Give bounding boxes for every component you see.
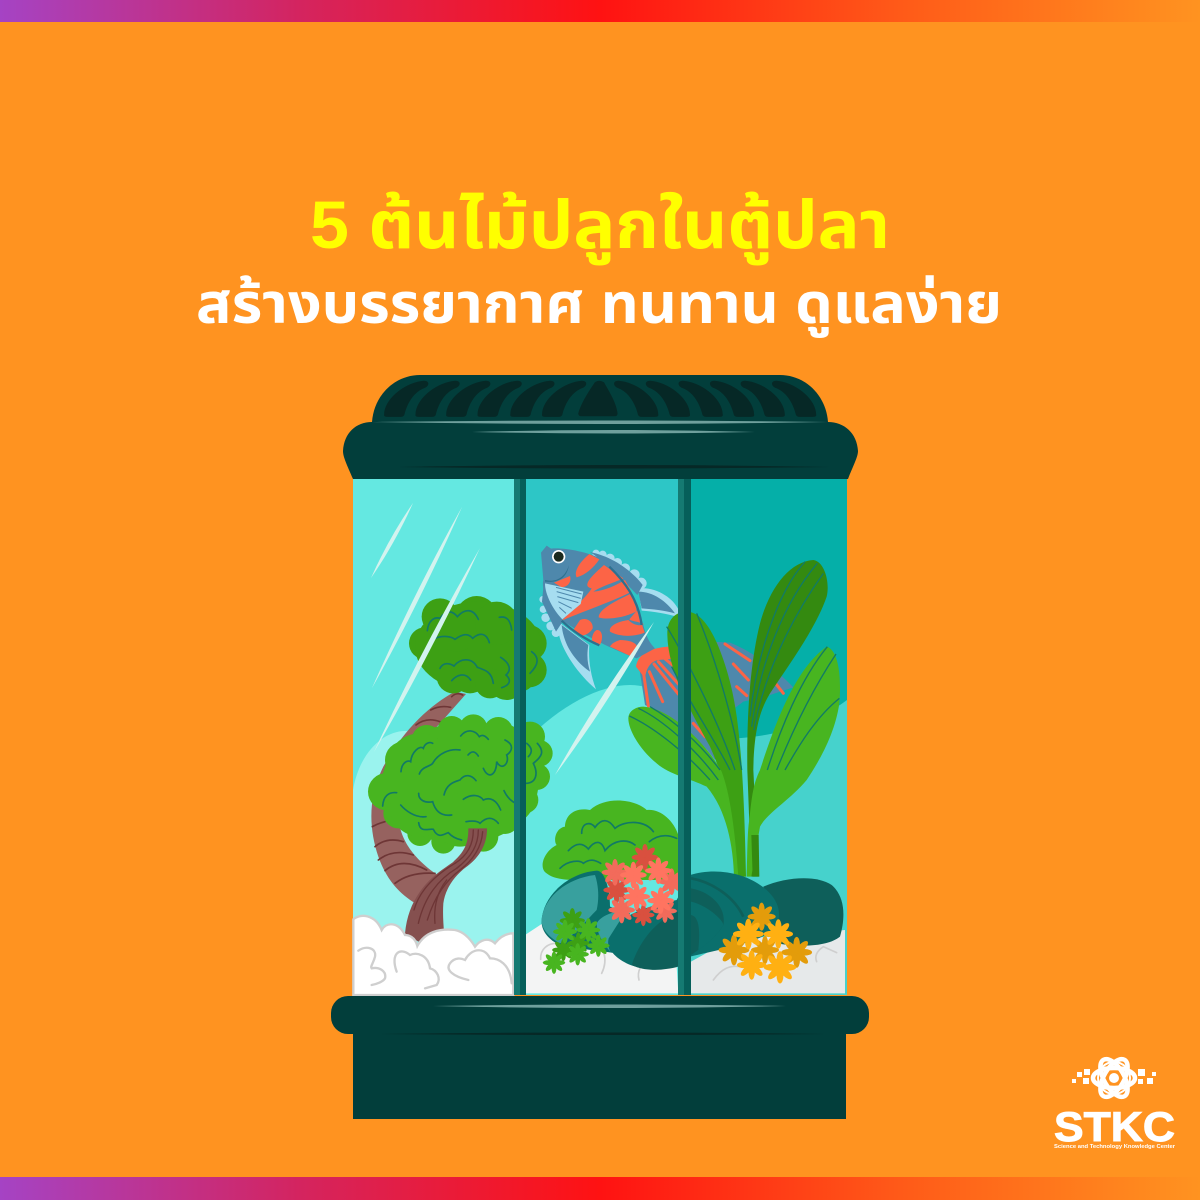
small bush lines [560, 821, 677, 868]
gravel curl lines [358, 948, 512, 988]
lower foliage [368, 714, 553, 854]
upper foliage [409, 596, 547, 700]
fish orange stripes [554, 554, 645, 657]
plant stem: dark [751, 835, 759, 877]
fish tail orange base [636, 646, 678, 678]
upper foliage lines [427, 611, 537, 688]
base highlight [433, 1004, 786, 1008]
lower foliage lines [383, 731, 542, 840]
left gravel [353, 916, 513, 995]
bottom gradient bar [0, 1177, 1200, 1200]
logo tagline: Science and Technology Knowledge Center [1054, 1144, 1176, 1150]
band shadow line [399, 465, 829, 468]
tank base rim [331, 996, 869, 1034]
pillar: left [514, 479, 526, 995]
grey gravel: right [691, 930, 845, 993]
back trunk [371, 692, 466, 905]
stone: right [763, 878, 843, 946]
stand shadow line [380, 1032, 825, 1035]
small bush [543, 801, 678, 880]
glass reflections [371, 503, 654, 775]
plant leaf: right veins [767, 647, 839, 770]
fish scallops [539, 550, 647, 637]
fish tail rays [643, 644, 783, 737]
stone: left rim [542, 871, 630, 953]
fish lower fin [558, 622, 596, 689]
lid vents [384, 381, 816, 417]
stone: ridge [691, 902, 723, 950]
fish belly band [542, 580, 563, 632]
tank top band [343, 422, 858, 479]
plant leaf: right [747, 647, 840, 877]
fish [539, 546, 793, 760]
logo pixels [1072, 1069, 1156, 1084]
plant leaf: top veins [750, 562, 823, 730]
gravel curl lines [541, 943, 837, 980]
fish lower fin inner [562, 625, 590, 672]
green flowers [543, 908, 610, 974]
logo atom icon [1093, 1055, 1135, 1101]
front trunk top stripes [455, 830, 483, 870]
front trunk top over foliage [453, 828, 487, 867]
band highlights [372, 420, 828, 434]
tank stand [353, 1033, 846, 1119]
fish pupil [554, 552, 564, 562]
subtitle: สร้างบรรยากาศ ทนทาน ดูแลง่าย [196, 272, 1002, 338]
plant leaf: low left veins [629, 707, 720, 780]
STKC logo [1054, 1055, 1176, 1150]
background hill: left [353, 731, 514, 995]
plant leaf: centre veins [667, 613, 742, 770]
tank lid [372, 375, 828, 422]
yellow flowers [719, 903, 812, 983]
aquarium illustration [331, 375, 869, 1119]
stone: middle shadow [632, 912, 678, 970]
background hill: centre [525, 685, 679, 995]
fish body [541, 546, 655, 658]
fish tail [638, 642, 793, 760]
coral flowers [602, 844, 685, 926]
plant leaf: centre [667, 612, 746, 877]
stone: left face [542, 875, 598, 943]
white gravel: centre [525, 924, 678, 993]
logo wordmark: STKC [1054, 1103, 1175, 1150]
fish pectoral fin [545, 583, 583, 619]
pillar: right [678, 479, 691, 995]
title: 5 ต้นไม้ปลูกในตู้ปลา [310, 188, 890, 266]
back trunk stripes [372, 694, 463, 883]
stone: right-side contour [691, 888, 724, 955]
fish rear fin [638, 588, 679, 617]
stone: dark ridge line [691, 878, 743, 917]
fish dorsal band [590, 552, 643, 595]
glass panel: left [353, 479, 515, 995]
fish body contours [562, 567, 642, 645]
fish rear fin inner [638, 592, 675, 613]
fish pectoral lines [556, 587, 582, 613]
front trunk [405, 828, 487, 942]
fish eye [552, 550, 565, 563]
lower region: bush, stones and flowers [525, 801, 845, 993]
plant leaf: top dark [747, 560, 828, 877]
aquatic plant [628, 560, 840, 877]
plant leaf: low left [628, 707, 738, 877]
background hill: right [690, 700, 847, 995]
glass panel: centre [525, 479, 679, 995]
top gradient bar [0, 0, 1200, 22]
fish gill [545, 565, 569, 582]
stone: middle [608, 871, 779, 968]
stone: middle light edge [597, 910, 627, 953]
glass panel: right [690, 479, 847, 995]
front trunk stripes [414, 830, 483, 923]
bonsai tree [353, 596, 553, 995]
